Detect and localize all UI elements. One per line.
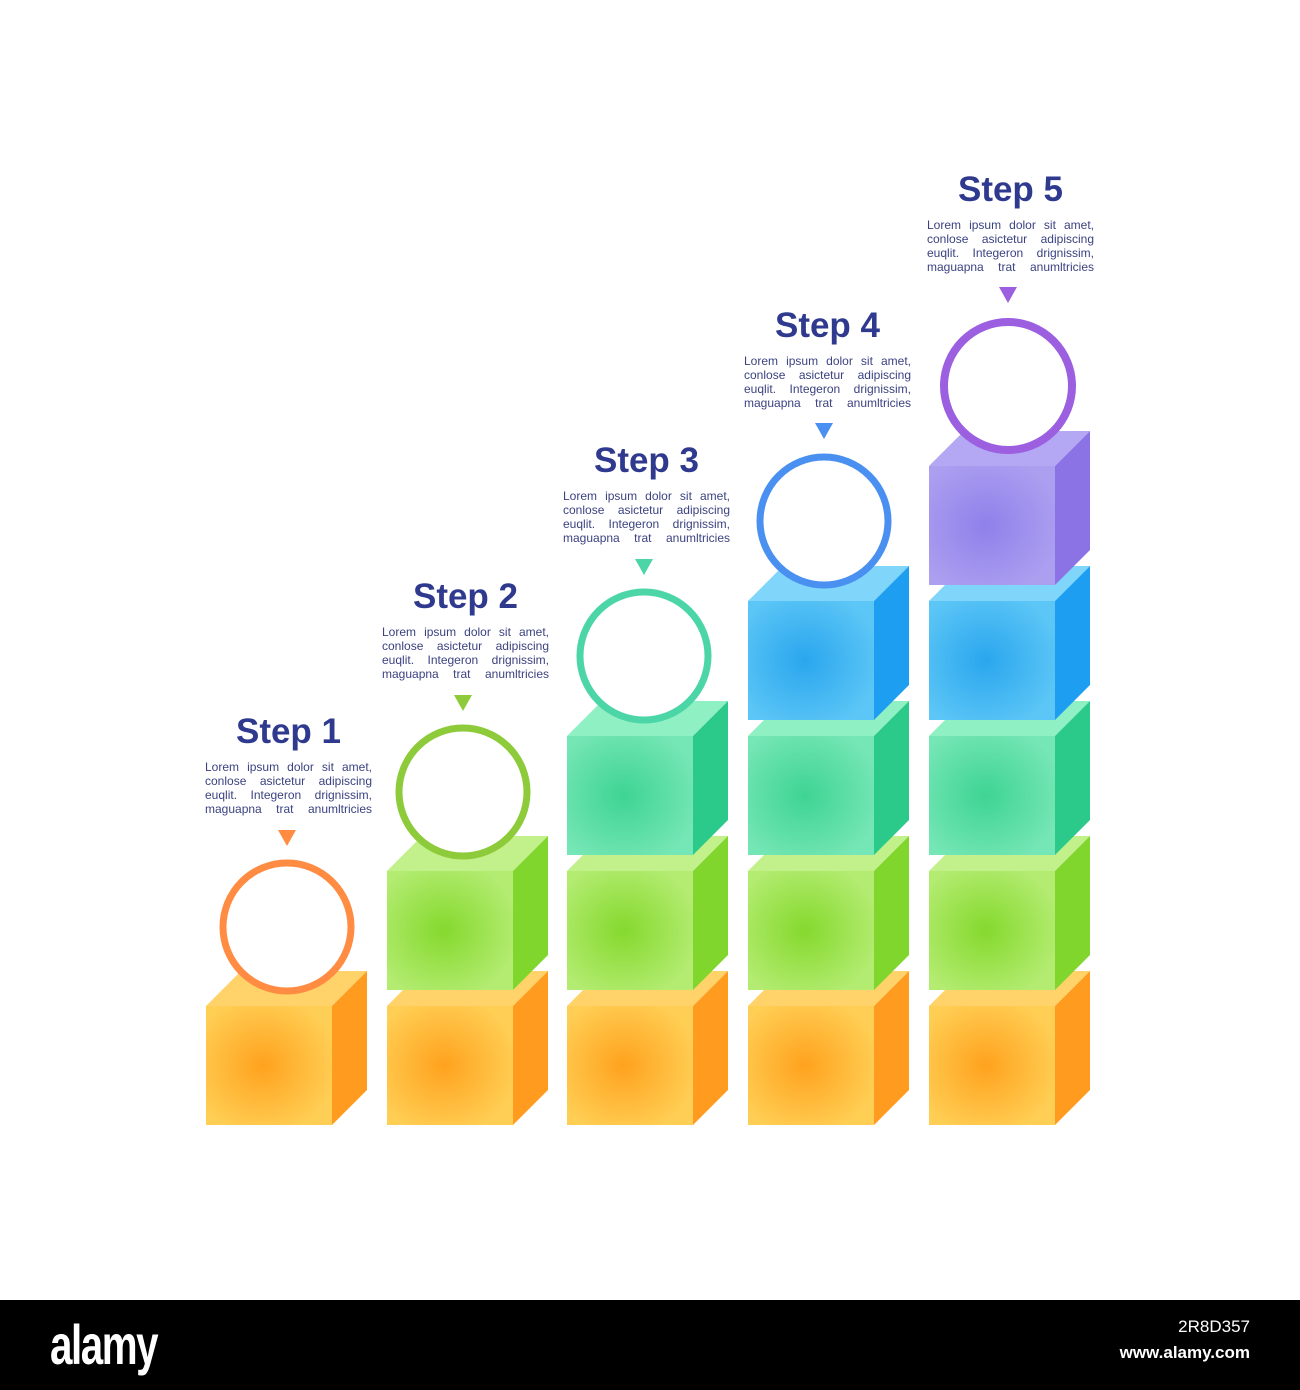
step 2 text: Lorem ipsum dolor sit amet, conlose asictetur adipiscing euqlit. Integeron drignissim, maguapna trat anumltricies [382,625,549,681]
step 3 text [563,441,730,545]
step 4 text: Lorem ipsum dolor sit amet, conlose asictetur adipiscing euqlit. Integeron drignissim, maguapna trat anumltricies [744,354,911,410]
column 5 [929,287,1090,1125]
step 3 text: Lorem ipsum dolor sit amet, conlose asictetur adipiscing euqlit. Integeron drignissim, maguapna trat anumltricies [563,489,730,545]
footer bar [0,1300,1300,1390]
step 1 text: Step 1 [236,712,341,751]
step 1 text: Lorem ipsum dolor sit amet, conlose asictetur adipiscing euqlit. Integeron drignissim, maguapna trat anumltricies [205,760,372,816]
step 5 text: Step 5 [958,170,1063,209]
step 5 text [927,170,1094,274]
step 4 text [744,306,911,410]
logo: alamy [50,1313,157,1376]
step 3 text: Step 3 [594,441,699,480]
column 3 [567,559,728,1125]
step 2 text [382,577,549,681]
step 2 text: Step 2 [413,577,518,616]
column 1 [206,830,367,1125]
step 1 text [205,712,372,816]
step 5 text: Lorem ipsum dolor sit amet, conlose asictetur adipiscing euqlit. Integeron drignissim, maguapna trat anumltricies [927,218,1094,274]
column 2 [387,695,548,1125]
image id [1120,1317,1250,1362]
column 4 [748,423,909,1125]
step 4 text: Step 4 [775,306,880,345]
image id: 2R8D357 [1178,1317,1250,1336]
image id: www.alamy.com [1120,1343,1250,1362]
